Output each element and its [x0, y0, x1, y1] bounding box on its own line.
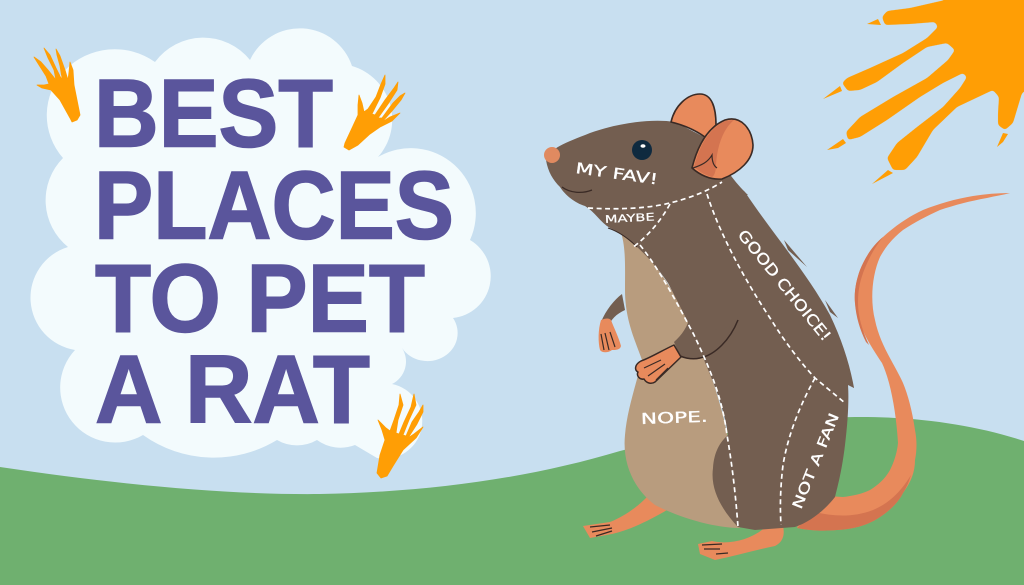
label: good choice: GOOD CHOICE! [734, 226, 835, 345]
cloud: title background [30, 28, 491, 459]
rat far foot [583, 497, 667, 538]
rat fur tufts [733, 181, 854, 388]
rat nose [544, 147, 560, 163]
rat body and head [546, 121, 854, 530]
title [94, 60, 454, 444]
rat far arm [599, 294, 625, 352]
icon: big orange paw [823, 0, 1024, 184]
icon: paw print top left [34, 48, 80, 122]
label: maybe: MAYBE [605, 211, 655, 226]
hill: green ground [0, 417, 1024, 585]
rat eye [632, 140, 652, 160]
title: A RAT [95, 336, 370, 444]
rat tail [797, 193, 1010, 531]
label: nope: NOPE. [641, 408, 708, 428]
rat foot claws [590, 525, 728, 554]
rat [544, 94, 1010, 560]
icon: paw print bottom [377, 394, 423, 478]
title: PLACES [94, 152, 454, 260]
dashed cut lines [588, 182, 845, 527]
rat front ear [692, 119, 753, 179]
rat mouth [562, 187, 592, 192]
rat jaw line [608, 228, 637, 247]
rat belly [620, 230, 740, 528]
label: my fav: MY FAV! [574, 159, 659, 189]
rat near arm [636, 316, 738, 383]
rat near foot [698, 525, 784, 560]
label: not a fan: NOT A FAN [790, 411, 843, 511]
title: TO PET [95, 246, 425, 352]
title: BEST [94, 60, 333, 168]
icon: paw print top right [344, 75, 405, 150]
rat back ear [671, 94, 716, 137]
